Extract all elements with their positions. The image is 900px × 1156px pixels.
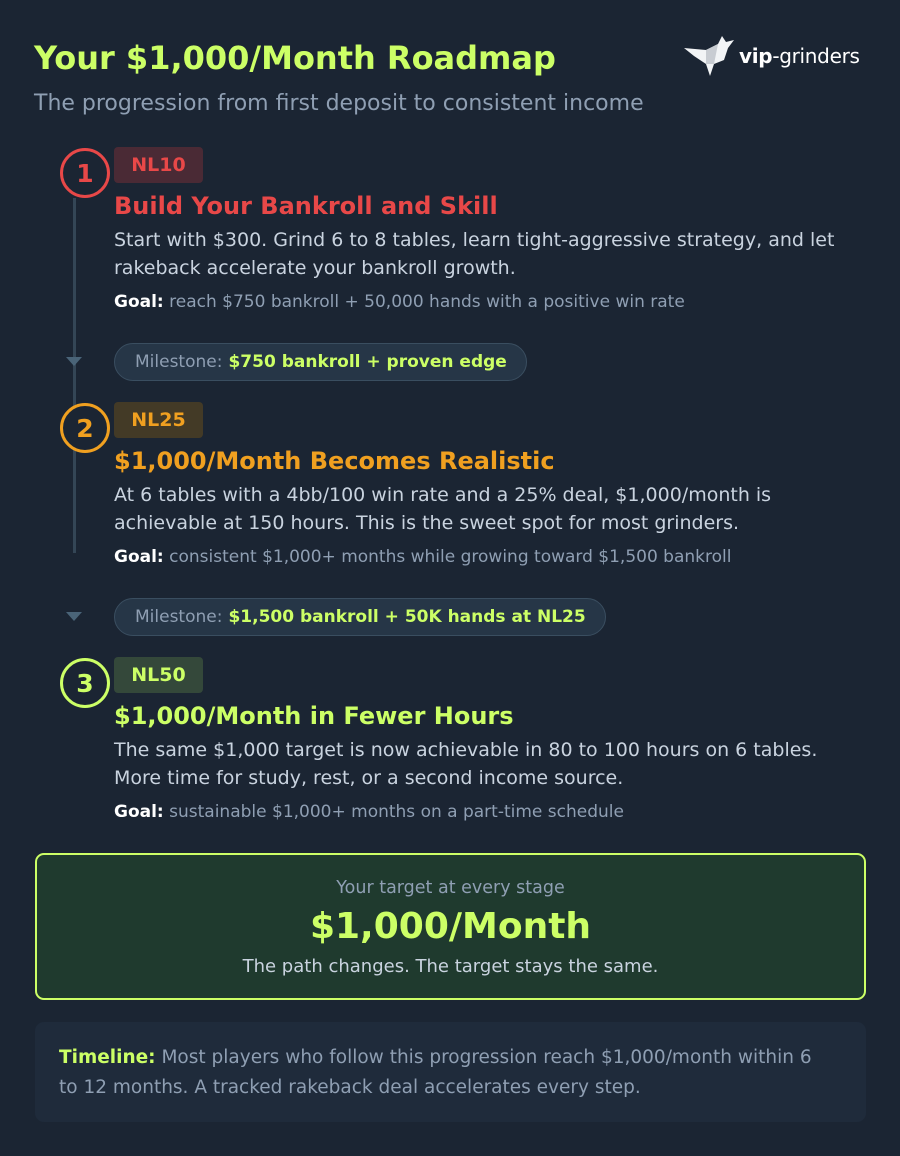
goal 2: Goal: consistent $1,000+ months while growing toward $1,500 bankroll xyxy=(114,547,731,567)
badge NL10: NL10 xyxy=(131,154,186,176)
circle 1 xyxy=(60,148,110,198)
milestone arrow 1 xyxy=(66,357,82,366)
milestone arrow 2 xyxy=(66,612,82,621)
target box xyxy=(35,853,866,1000)
badge NL10 xyxy=(114,147,203,183)
milestone 2: $1,500 bankroll + 50K hands at NL25 xyxy=(228,607,586,627)
body 3: The same $1,000 target is now achievable in 80 to 100 hours on 6 tables. More time for study, rest, or a second income source. xyxy=(114,739,817,789)
goal 1: Goal: reach $750 bankroll + 50,000 hands with a positive win rate xyxy=(114,292,685,312)
subtitle: The progression from first deposit to consistent income xyxy=(34,91,644,116)
heading 3: $1,000/Month in Fewer Hours xyxy=(114,702,514,730)
timeline note xyxy=(35,1022,866,1122)
body 2: At 6 tables with a 4bb/100 win rate and a 25% deal, $1,000/month is achievable at 150 hours. This is the sweet spot for most grinders. xyxy=(114,484,771,534)
title: Your $1,000/Month Roadmap xyxy=(34,39,556,77)
milestone 1 xyxy=(114,343,527,381)
circle 1: 1 xyxy=(76,158,94,188)
milestone 1: $750 bankroll + proven edge xyxy=(228,352,507,372)
logo xyxy=(684,36,860,76)
circle 2 xyxy=(60,403,110,453)
circle 3: 3 xyxy=(76,668,94,698)
heading 2: $1,000/Month Becomes Realistic xyxy=(114,447,555,475)
badge NL25 xyxy=(114,402,203,438)
milestone 2: Milestone: xyxy=(135,607,222,627)
step 1 xyxy=(60,147,834,312)
circle 3 xyxy=(60,658,110,708)
target caption: The path changes. The target stays the same. xyxy=(243,956,658,977)
logo: vip-grinders xyxy=(739,44,860,68)
badge NL25: NL25 xyxy=(131,409,186,431)
timeline line xyxy=(73,198,76,553)
badge NL50: NL50 xyxy=(131,664,186,686)
milestone 2 xyxy=(114,598,606,636)
target value: $1,000/Month xyxy=(310,906,591,947)
heading 1: Build Your Bankroll and Skill xyxy=(114,192,498,220)
circle 2: 2 xyxy=(76,414,94,442)
step 3 xyxy=(60,657,817,822)
badge NL50 xyxy=(114,657,203,693)
body 1: Start with $300. Grind 6 to 8 tables, learn tight-aggressive strategy, and let rakeback accelerate your bankroll growth. xyxy=(114,229,834,279)
timeline note: Timeline: Most players who follow this progression reach $1,000/month within 6 to 12 months. A tracked rakeback deal accelerates every step. xyxy=(59,1047,812,1098)
target label: Your target at every stage xyxy=(336,878,565,898)
milestone 1: Milestone: xyxy=(135,352,222,372)
step 2 xyxy=(60,402,771,567)
goal 3: Goal: sustainable $1,000+ months on a part-time schedule xyxy=(114,802,624,822)
